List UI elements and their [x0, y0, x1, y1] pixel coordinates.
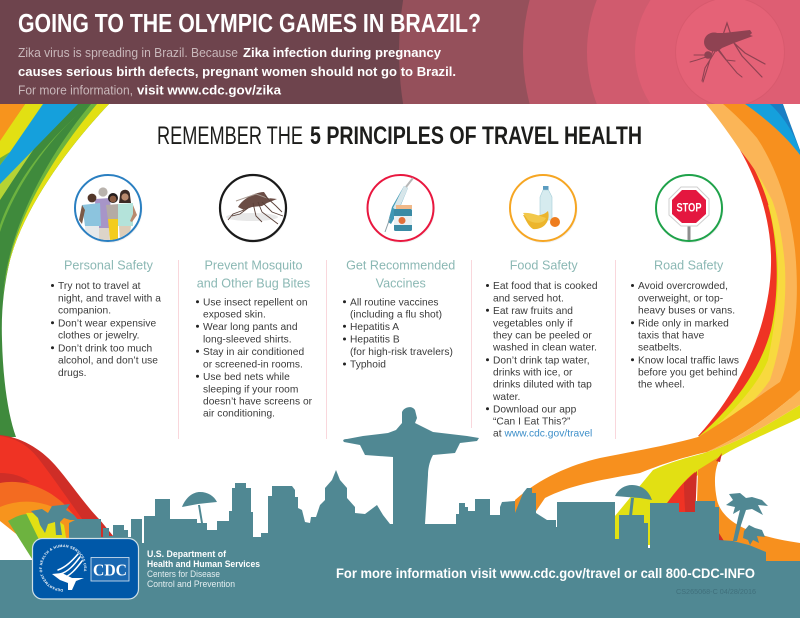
- list: road safety tips: seatbelts.: [638, 343, 682, 354]
- list: food safety tips: at www.cdc.gov/travel: [493, 429, 592, 440]
- list: vaccines: (including a flu shot): [350, 309, 442, 320]
- list: food safety tips: they can be peeled or: [493, 331, 592, 342]
- footer call to action: For more information visit www.cdc.gov/travel or call 800-CDC-INFO: [336, 566, 755, 581]
- icon: palm trees right: [726, 493, 768, 545]
- list: personal safety tips: [51, 281, 161, 379]
- main heading: [157, 122, 642, 150]
- list: food safety tips: drinks diluted with tap: [493, 380, 592, 391]
- logo: CDC: CDC: [93, 560, 127, 580]
- lower left ribbons: [0, 435, 114, 562]
- agency name: Health and Human Services: [147, 559, 260, 569]
- list: food safety tips: Eat raw fruits and: [493, 306, 573, 317]
- heading: prevent mosquito and other bug bites: [197, 258, 310, 291]
- list: food safety tips: washed in clean water.: [492, 343, 597, 354]
- list: vaccines: Hepatitis A: [350, 322, 399, 333]
- agency name: [147, 549, 260, 589]
- list: road safety tips: taxis that have: [638, 331, 705, 342]
- list: road safety tips: the wheel.: [638, 380, 685, 391]
- list: food safety tips: and served hot.: [493, 293, 564, 304]
- header title: GOING TO THE OLYMPIC GAMES IN BRAZIL?: [18, 8, 481, 38]
- skyline with Christ the Redeemer statue: [0, 407, 800, 618]
- icon: syringe and vial: [367, 175, 435, 243]
- list: road safety tips: [631, 281, 739, 391]
- icon: beach umbrella left: [182, 492, 217, 523]
- main heading: REMEMBER THE: [157, 122, 303, 150]
- heading: get recommended vaccines: Get Recommended: [346, 258, 455, 272]
- list: mosquito bite prevention tips: Wear long pants and: [203, 322, 298, 333]
- list: mosquito bite prevention tips: or screened-in rooms.: [203, 359, 303, 370]
- list: vaccines: (for high-risk travelers): [350, 347, 453, 358]
- icon: stop sign: STOP: [676, 202, 702, 214]
- icon: mosquito: [220, 175, 288, 243]
- list: mosquito bite prevention tips: sleeping if your room: [203, 384, 298, 395]
- icon: mosquito silhouette: [690, 23, 765, 82]
- list: personal safety tips: alcohol, and don’t use: [58, 356, 158, 367]
- header warning text: visit www.cdc.gov/zika: [137, 84, 282, 98]
- icon: beach umbrella right: [615, 485, 652, 516]
- list: road safety tips: Ride only in marked: [638, 318, 729, 329]
- list: personal safety tips: Don’t wear expensive: [58, 318, 156, 329]
- list: personal safety tips: drugs.: [58, 368, 87, 379]
- header warning text: causes serious birth defects, pregnant women should not go to Brazil.: [18, 65, 456, 79]
- list: mosquito bite prevention tips: Use bed nets while: [203, 372, 290, 383]
- heading: personal safety: Personal Safety: [64, 258, 154, 272]
- list: mosquito bite prevention tips: Stay in air conditioned: [203, 347, 304, 358]
- right ribbons: [515, 104, 800, 566]
- left ribbons: [0, 104, 109, 437]
- list: food safety tips: Don’t drink tap water,: [493, 355, 590, 366]
- list: mosquito bite prevention tips: doesn’t have screens or: [203, 396, 313, 407]
- list: food safety tips: Eat food that is cooked: [493, 281, 598, 292]
- list: food safety tips: [486, 281, 598, 440]
- list: vaccines: Typhoid: [350, 360, 386, 371]
- panel: recommended vaccines: [343, 175, 455, 371]
- main heading: 5 PRINCIPLES OF TRAVEL HEALTH: [310, 122, 642, 150]
- agency name: U.S. Department of: [147, 549, 227, 559]
- icon: water bottle, bananas and orange: [510, 175, 578, 243]
- list: personal safety tips: Don’t drink too much: [58, 343, 152, 354]
- icon: palm tree left: [31, 504, 78, 535]
- header warning text: [18, 46, 456, 98]
- heading: prevent mosquito and other bug bites: Prevent Mosquito: [204, 258, 303, 272]
- list: vaccines: [343, 297, 453, 371]
- list: food safety tips: “Can I Eat This?”: [493, 417, 571, 428]
- panel: personal safety: [51, 175, 161, 379]
- list: mosquito bite prevention tips: air conditioning.: [203, 409, 275, 420]
- list: mosquito bite prevention tips: Use insect repellent on: [203, 297, 308, 308]
- list: mosquito bite prevention tips: exposed skin.: [203, 309, 266, 320]
- heading: prevent mosquito and other bug bites: and Other Bug Bites: [197, 277, 310, 291]
- list: food safety tips: Download our app: [493, 404, 577, 415]
- list: mosquito bite prevention tips: long-sleeved shirts.: [203, 334, 292, 345]
- list: personal safety tips: clothes or jewelry.: [58, 331, 140, 342]
- panel: prevent mosquito bites: [196, 175, 313, 420]
- list: vaccines: All routine vaccines: [350, 297, 439, 308]
- list: food safety tips: water.: [492, 392, 520, 403]
- list: road safety tips: heavy buses or vans.: [638, 306, 735, 317]
- panel: road safety: [631, 175, 739, 391]
- icon: stop sign: [656, 175, 724, 243]
- list: personal safety tips: companion.: [58, 306, 111, 317]
- header band with concentric circles: [0, 0, 800, 104]
- icon: group of travelers: [74, 175, 142, 243]
- heading: get recommended vaccines: Vaccines: [376, 277, 426, 291]
- list: mosquito bite prevention tips: [196, 297, 313, 420]
- header warning text: Zika virus is spreading in Brazil. Because: [18, 46, 238, 60]
- list: road safety tips: before you get behind: [638, 368, 738, 379]
- heading: food safety: Food Safety: [510, 258, 578, 272]
- list: road safety tips: Know local traffic laws: [638, 355, 739, 366]
- document code: CS265068-C 04/28/2016: [676, 587, 756, 596]
- icon: HHS seal: DEPARTMENT OF HEALTH & HUMAN SERVICES USA: [40, 544, 87, 592]
- list: vaccines: Hepatitis B: [350, 335, 400, 346]
- panel: food safety: [486, 175, 598, 440]
- list: personal safety tips: Try not to travel at: [58, 281, 141, 292]
- agency name: Control and Prevention: [147, 579, 235, 589]
- header warning text: Zika infection during pregnancy: [243, 46, 441, 60]
- heading: get recommended vaccines: [346, 258, 455, 291]
- list: road safety tips: Avoid overcrowded,: [638, 281, 728, 292]
- heading: road safety: Road Safety: [654, 258, 724, 272]
- list: personal safety tips: night, and travel with a: [58, 293, 161, 304]
- list: food safety tips: vegetables only if: [493, 318, 573, 329]
- header warning text: For more information,: [18, 84, 133, 98]
- list: road safety tips: overweight, or top-: [638, 293, 723, 304]
- logo: HHS and CDC badge: [32, 538, 140, 600]
- agency name: Centers for Disease: [147, 569, 220, 579]
- list: food safety tips: drinks with ice, or: [493, 368, 573, 379]
